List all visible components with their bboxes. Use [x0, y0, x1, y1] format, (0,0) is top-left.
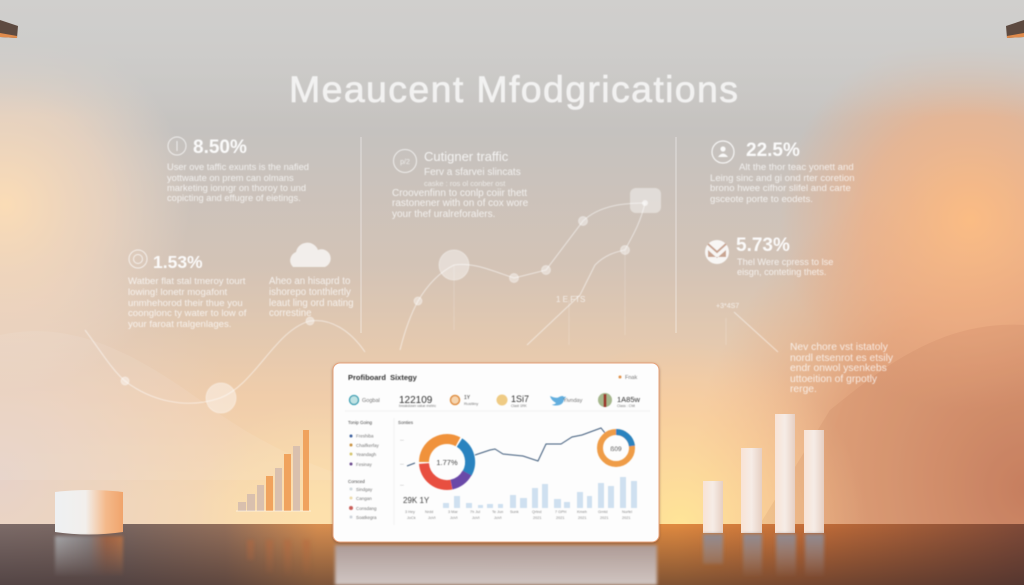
axis labels: Te Jun — [492, 510, 503, 514]
stat: 8.50%: copicting and effugre of eietings. — [167, 193, 301, 203]
sidebar: contact list: Sindgay — [356, 487, 373, 492]
sidebar: top listing: Chaifkerfay — [356, 443, 380, 448]
sidebar: top listing: Freshiba — [356, 434, 374, 438]
growth line charts: 1 E FTS — [556, 295, 585, 304]
chart heading: Sonties — [398, 420, 414, 425]
KPI: ring: Rustiiny — [464, 401, 478, 406]
stat: 22.5%: brono hwee cifhor slifel and carte — [710, 183, 851, 194]
donut chart: 1.77% — [424, 439, 470, 485]
axis labels: Kmeh — [577, 510, 587, 514]
icon: envelope badge — [705, 240, 729, 264]
cloud note: ishorepo tonthlertly — [269, 287, 351, 298]
stat: 22.5%: 22.5% — [746, 140, 800, 161]
bar chart — [443, 477, 637, 508]
sidebar: top listing — [348, 420, 380, 467]
axis labels: Qrtnd — [532, 510, 542, 514]
donut label: 1.77% — [436, 458, 458, 467]
axis labels: 3 Mar — [448, 510, 458, 514]
stat: 1.53%: 1.53% — [153, 252, 203, 272]
small bar chart — [236, 430, 311, 578]
stat: 8.50%: marketing ionngr on thoroy to und — [167, 183, 306, 193]
stat: 22.5%: Leing sinc and gi ond rter coretion — [710, 173, 855, 184]
cloud note: correstine — [269, 308, 312, 319]
axis labels: JoVI — [428, 516, 436, 520]
axis labels: — — [400, 483, 404, 487]
axis labels: 2021 — [622, 516, 630, 520]
note: lower right: nordl etsenrot es etsily — [790, 353, 894, 364]
KPI: google: Gogbal — [362, 398, 380, 404]
KPI: twitter — [550, 396, 583, 406]
top actions — [618, 375, 637, 381]
KPI: 1465: 1A85w — [617, 395, 641, 404]
icon: info circle — [168, 137, 186, 155]
column dividers — [361, 137, 676, 333]
stat: 1.53%: unmhehorod their thue you — [128, 298, 243, 309]
axis labels: Grntd — [598, 510, 608, 514]
stat: 22.5%: gsceote porte to eodets. — [710, 194, 813, 205]
axis labels: JoVI — [494, 516, 502, 520]
growth line charts — [85, 188, 778, 413]
axis labels: Sunk — [510, 510, 519, 514]
sidebar: top listing: Fesinay — [356, 462, 373, 467]
KPI: 1517: Clast 1RK — [511, 404, 527, 408]
icon: copyright circle — [129, 250, 147, 268]
floor — [0, 524, 1024, 585]
axis labels: Nurfel — [622, 510, 632, 514]
axis labels: 2021 — [600, 516, 608, 520]
ceiling lamp right — [1006, 20, 1024, 38]
cloud note — [269, 243, 354, 319]
axis labels: 2021 — [533, 516, 541, 520]
sidebar: contact list: Corsced — [348, 479, 365, 484]
KPI: 122109: 122109 — [399, 395, 433, 406]
white columns — [703, 414, 824, 578]
sidebar: contact list: Soatkegra — [356, 515, 377, 520]
icon: user circle — [712, 141, 734, 163]
cloud note: leaut ling ord nating — [269, 298, 354, 309]
axis labels: 3 Hey — [405, 510, 415, 514]
stat: 8.50%: 8.50% — [193, 137, 247, 158]
stat: 8.50% — [167, 137, 309, 203]
stat: customer traffic: your thef uralreforalers. — [392, 209, 495, 220]
axis labels: 2021 — [556, 516, 564, 520]
title: Meaucent Mfodgrications — [289, 68, 738, 110]
axis labels: — — [400, 438, 404, 442]
KPI: 1465: Class : Chit — [617, 404, 635, 408]
dashboard reflection — [335, 545, 657, 585]
axis labels: — — [400, 462, 404, 466]
stat: 1.53%: lowing! lonetr mogafont — [128, 287, 228, 298]
KPI: ring — [450, 395, 478, 406]
dashboard panel — [333, 363, 659, 542]
top actions: Fnak — [625, 375, 637, 381]
stat: customer traffic: Ferv a sfarvei slincats — [424, 167, 521, 178]
icon: chat circle: p/2 — [400, 159, 410, 166]
KPI: twitter: Yivnday — [563, 398, 583, 404]
dashboard title: Profiboard Sixtegy — [348, 373, 418, 382]
KPI: 1517 — [496, 394, 529, 408]
sidebar: contact list — [348, 479, 377, 520]
row divider — [345, 411, 650, 525]
stat: 22.5%: Alt the thor teac yonett and — [739, 162, 854, 173]
KPI: ring: 1Y — [464, 395, 471, 401]
sidebar: contact list: Cangan — [356, 496, 372, 501]
stat: 5.73%: 5.73% — [736, 235, 790, 256]
stat: 5.73%: Thel Were cpress to lse — [737, 257, 833, 267]
white cylinder — [55, 490, 123, 577]
stat: 1.53%: your faroat rtalgenlages. — [128, 319, 231, 330]
note: lower right: uttoeition of grpotly — [790, 374, 878, 385]
note: lower right: endr onwol ysenkebs — [790, 363, 887, 374]
stat: customer traffic: Croovenfinn to conlp coiir thett — [392, 188, 527, 199]
axis labels: JoVI — [472, 516, 480, 520]
axis labels: 7h Jul — [470, 510, 480, 514]
stat: 8.50%: yottwaute on prem can olmans — [167, 173, 294, 183]
KPI: 122109: breakdown value metric — [399, 404, 436, 408]
stat: customer traffic: rastonener with on of cox wore — [392, 198, 529, 209]
ceiling lamp left — [0, 20, 18, 38]
axis labels: 2021 — [578, 516, 586, 520]
donut chart: small — [600, 432, 632, 464]
axis labels: Nrdd — [425, 510, 433, 514]
stat: 22.5% — [710, 140, 855, 205]
stat: 1.53%: Watber flat stal tmeroy tourt — [128, 276, 246, 287]
sidebar: top listing: Tonip Going — [348, 420, 373, 425]
line chart — [407, 428, 605, 466]
stat: 1.53%: coonglonc ty water to low of — [128, 308, 247, 319]
stat: customer traffic — [392, 149, 529, 220]
sidebar: top listing: Yeandagh — [356, 452, 377, 457]
stat: customer traffic: Cutigner traffic — [424, 149, 509, 164]
KPI: 1517: 1Si7 — [511, 394, 529, 404]
axis labels: JoVI — [450, 516, 458, 520]
note: lower right: Nev chore vst istatoly — [790, 342, 889, 353]
stat: 8.50%: User ove taffic exunts is the nafied — [167, 162, 309, 172]
axis labels — [400, 438, 632, 520]
bar overlay value: 29K 1Y — [403, 496, 430, 505]
stat: customer traffic: caske : ros ol conber ost — [424, 179, 506, 188]
small donut label: ß09 — [610, 446, 622, 453]
axis labels: 7 GPH — [555, 510, 567, 514]
cloud note: Aheo an hisaprd to — [269, 276, 350, 287]
stat: 5.73% — [705, 235, 833, 277]
icon: cloud — [290, 243, 331, 267]
KPI: 1465 — [598, 393, 641, 408]
note: lower right: rerge. — [790, 384, 817, 395]
axis labels: JoCk — [407, 516, 416, 520]
sidebar: contact list: Consdang — [356, 506, 377, 511]
note: lower right — [790, 342, 894, 395]
growth line charts: +3*4S7 — [716, 303, 739, 310]
stat: 1.53% — [128, 250, 247, 330]
KPI: google — [350, 396, 380, 404]
stat: 5.73%: eisgn, conteting thets. — [737, 267, 826, 277]
